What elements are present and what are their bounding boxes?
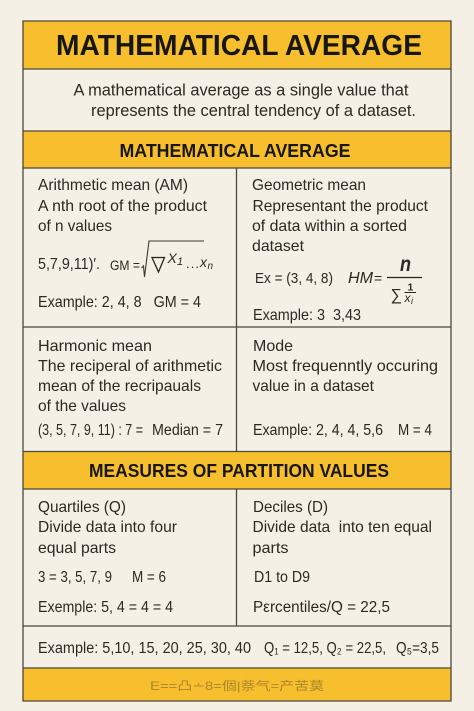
panel: geometric mean: Ex = (3, 4, 8)	[255, 270, 333, 287]
panel: harmonic mean: of the values	[38, 398, 126, 415]
panel: geometric mean: Geometric mean	[252, 177, 366, 194]
panel: geometric mean: of data within a sorted	[252, 218, 407, 235]
panel: harmonic mean	[38, 338, 223, 439]
panel: mode: Example: 2, 4, 4, 5,6	[253, 422, 383, 439]
panel: quartiles: Quartiles (Q)	[38, 499, 126, 516]
panel: harmonic mean: Harmonic mean	[38, 338, 152, 355]
panel: harmonic mean: (3, 5, 7, 9, 11) : 7 =	[38, 422, 143, 439]
formula: harmonic mean fraction: x	[404, 291, 412, 305]
formula: geometric mean root: 1	[177, 256, 183, 268]
formula: geometric mean root: GM =	[110, 258, 140, 273]
panel: geometric mean: dataset	[252, 238, 305, 255]
panel: geometric mean: Example: 3 3,43	[253, 307, 361, 324]
panel: mode: Mode	[253, 338, 293, 355]
panel: mode: M = 4	[398, 422, 432, 439]
panel: arithmetic mean: Example: 2, 4, 8 GM = 4	[38, 294, 201, 311]
panel: geometric mean: Representant the product	[252, 198, 429, 215]
panel: deciles: D1 to D9	[254, 569, 310, 586]
panel: arithmetic mean: 5,7,9,11)′.	[38, 256, 100, 273]
formula: harmonic mean fraction: i	[411, 296, 414, 306]
panel: deciles: Pεrcentiles/Q = 22,5	[253, 599, 390, 616]
worked example row: Example: 5,10, 15, 20, 25, 30, 40	[38, 640, 251, 657]
formula: geometric mean root: n	[208, 261, 214, 272]
section heading: measures of partition values	[23, 452, 451, 489]
worked example row: Q₅=3,5	[396, 640, 439, 657]
worked example row: Q₁ = 12,5, Q₂ = 22,5,	[264, 640, 386, 657]
panel: mode	[252, 338, 438, 439]
panel: mode: Most frequenntly occuring	[252, 358, 438, 375]
title band	[23, 21, 451, 69]
formula: harmonic mean fraction	[348, 253, 422, 306]
footer band: E==凸∸8=個|萘气=产苦莫	[150, 678, 324, 693]
formula: geometric mean root: X	[166, 250, 178, 266]
footer band	[23, 668, 451, 701]
panel: harmonic mean: Median = 7	[152, 422, 223, 439]
section heading: mathematical average	[23, 131, 451, 168]
intro description: A mathematical average as a single value that	[74, 80, 409, 100]
panel: quartiles: M = 6	[132, 569, 166, 586]
panel: quartiles: Divide data into four	[38, 519, 177, 536]
panel: arithmetic mean	[38, 177, 214, 311]
formula: geometric mean root: x	[199, 254, 208, 270]
worked example row	[38, 640, 439, 657]
title band: MATHEMATICAL AVERAGE	[56, 30, 422, 62]
intro description	[74, 80, 416, 120]
panel: deciles	[252, 499, 432, 616]
formula: harmonic mean fraction: n	[400, 253, 411, 276]
panel: quartiles	[38, 499, 177, 616]
panel: quartiles: equal parts	[38, 540, 116, 557]
formula: harmonic mean fraction: ∑	[390, 287, 402, 304]
panel: deciles: Divide data into ten equal	[252, 519, 432, 536]
formula: harmonic mean fraction: 1	[408, 282, 414, 294]
panel: arithmetic mean: A nth root of the product	[38, 198, 208, 215]
intro description: represents the central tendency of a dataset.	[91, 101, 416, 120]
panel: deciles: parts	[252, 540, 289, 557]
formula: harmonic mean fraction: HM	[348, 270, 373, 287]
panel: quartiles: 3 = 3, 5, 7, 9	[38, 569, 112, 586]
formula: geometric mean root: ...	[186, 256, 199, 271]
panel: harmonic mean: The reciperal of arithmetic	[38, 358, 222, 375]
panel: arithmetic mean: Arithmetic mean (AM)	[38, 177, 188, 194]
section heading: mathematical average: MATHEMATICAL AVERAGE	[120, 140, 350, 161]
section heading: measures of partition values: MEASURES OF PARTITION VALUES	[89, 460, 389, 481]
formula: harmonic mean fraction: =	[374, 270, 382, 286]
panel: geometric mean	[252, 177, 429, 324]
panel: mode: value in a dataset	[252, 378, 375, 395]
panel: deciles: Deciles (D)	[253, 499, 328, 516]
panel: quartiles: Exemple: 5, 4 = 4 = 4	[38, 599, 173, 616]
panel: harmonic mean: mean of the recripauals	[38, 378, 201, 395]
panel: arithmetic mean: of n values	[38, 218, 112, 235]
formula: geometric mean root	[110, 241, 214, 277]
